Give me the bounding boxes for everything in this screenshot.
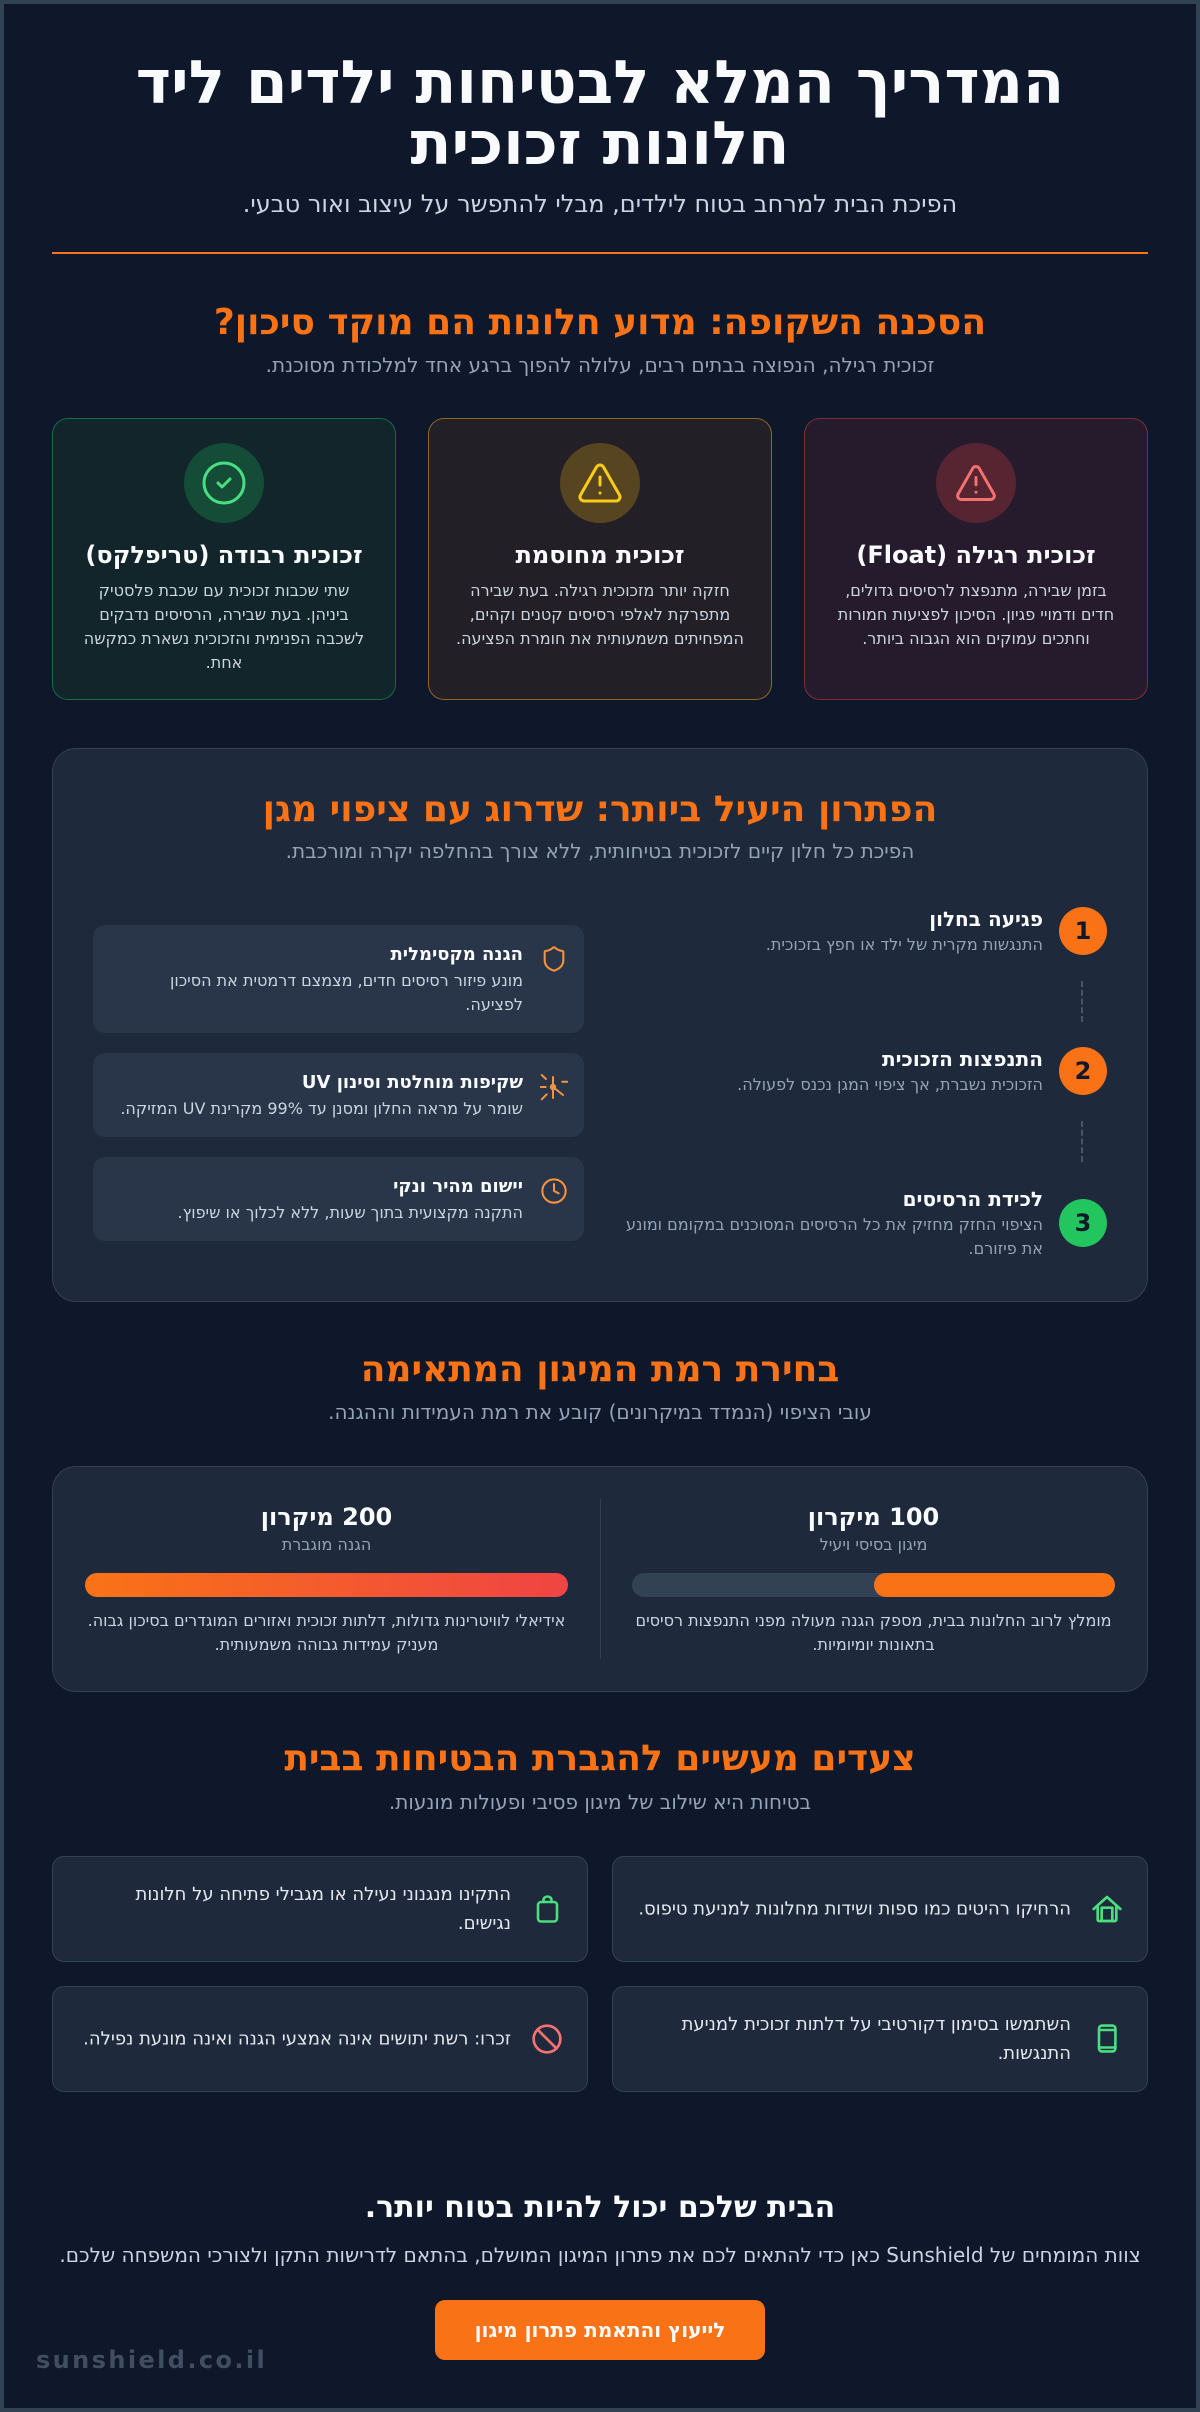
step 1 title: פגיעה בחלון: [929, 907, 1043, 931]
main title: חלונות זכוכית: [410, 109, 790, 179]
panel: float glass card: [804, 418, 1148, 700]
icon: lock clip: [536, 1895, 558, 1923]
heading: practical steps: צעדים מעשיים להגברת הבטיחות בבית: [284, 1738, 916, 1779]
step number 2: [1059, 1047, 1107, 1095]
icon: sun rays: [540, 1074, 568, 1100]
step number 3: 3: [1075, 1209, 1091, 1237]
step number 1: 1: [1075, 917, 1091, 945]
card text: laminated glass: שתי שכבות זכוכית עם שכבת פלסטיק ביניהן. בעת שבירה, הרסיסים נדבקים לשכבה הפנימית והזכוכית נשארת כמקשה אחת.: [84, 581, 364, 672]
feature: fast installation: [93, 1157, 584, 1241]
heading: the transparent danger: הסכנה השקופה: מדוע חלונות הם מוקד סיכון?: [214, 302, 986, 343]
tip: decorative marking: [612, 1986, 1148, 2092]
subheading: the transparent danger: זכוכית רגילה, הנפוצה בבתים רבים, עלולה להפוך ברגע אחד למלכודת מסוכנת.: [266, 353, 934, 377]
connector: step 1 to 2: [1081, 981, 1083, 1022]
step number 3: [1059, 1199, 1107, 1247]
icon: shield: [544, 946, 564, 972]
panel: laminated glass card: [52, 418, 396, 700]
main title: המדריך המלא לבטיחות ילדים ליד: [136, 48, 1064, 118]
200 micron title: 200 מיקרון: [261, 1503, 392, 1531]
icon: house: [1092, 1896, 1122, 1922]
step 1: impact: [766, 907, 1107, 955]
connector: step 2 to 3: [1081, 1121, 1083, 1162]
100 micron title: 100 מיקרון: [808, 1503, 939, 1531]
100 micron label: מיגון בסיסי ויעיל: [820, 1535, 927, 1554]
call to action button: [435, 2300, 765, 2360]
feature title: יישום מהיר ונקי: [393, 1176, 523, 1197]
panel: protective film solution: [52, 748, 1148, 1302]
feature title: שקיפות מוחלטת וסינון UV: [302, 1072, 523, 1093]
subheading: protective film: הפיכת כל חלון קיים לזכוכית בטיחותית, ללא צורך בהחלפה יקרה ומורכבת.: [286, 839, 914, 863]
call to action button: לייעוץ והתאמת פתרון מיגון: [475, 2318, 725, 2342]
heading: protection level: בחירת רמת המיגון המתאימה: [361, 1349, 839, 1390]
feature text: התקנה מקצועית בתוך שעות, ללא לכלוך או שיפוץ.: [177, 1203, 523, 1222]
card text: tempered glass: חזקה יותר מזכוכית רגילה. בעת שבירה מתפרקת לאלפי רסיסים קטנים וקהים, המפחיתים משמעותית את חומרת הפציעה.: [456, 581, 744, 648]
icon: phone-shaped marking: [1098, 2024, 1117, 2053]
column: 200 micron: [85, 1503, 568, 1654]
tip: insect net warning: [52, 1986, 588, 2092]
feature: maximum protection: [93, 925, 584, 1033]
icon: clock: [541, 1178, 567, 1204]
icon: yellow warning triangle: [560, 443, 640, 523]
brand watermark: sunshield.co.il: [36, 2346, 267, 2374]
step 2 title: התנפצות הזכוכית: [882, 1047, 1043, 1071]
feature: clarity and UV: [93, 1053, 584, 1137]
card text: float glass: בזמן שבירה, מתנפצת לרסיסים גדולים, חדים ודמויי פגיון. הסיכון לפציעות חמורות וחתכים עמוקים הוא הגבוה ביותר.: [838, 581, 1114, 648]
tip: move furniture: [612, 1856, 1148, 1962]
card title: laminated glass: זכוכית רבודה (טריפלקס): [85, 541, 363, 569]
divider: [600, 1499, 601, 1659]
card title: float glass: זכוכית רגילה (Float): [856, 541, 1096, 569]
call to action title: הבית שלכם יכול להיות בטוח יותר.: [365, 2190, 835, 2225]
tip text: השתמשו בסימון דקורטיבי על דלתות זכוכית למניעת התנגשות.: [682, 2014, 1071, 2064]
step 2 text: הזכוכית נשברת, אך ציפוי המגן נכנס לפעולה.: [737, 1075, 1043, 1094]
panel: thickness comparison: [52, 1466, 1148, 1692]
thickness bar 100%: [85, 1573, 568, 1597]
icon: green check circle: [184, 443, 264, 523]
step 3 title: לכידת הרסיסים: [903, 1187, 1043, 1211]
feature title: הגנה מקסימלית: [390, 944, 523, 965]
call to action text: צוות המומחים של Sunshield כאן כדי להתאים לכם את פתרון המיגון המושלם, בהתאם לדרישות התקן ולצורכי המשפחה שלכם.: [59, 2243, 1141, 2267]
step 2: shatter: [737, 1047, 1107, 1095]
feature text: מונע פיזור רסיסים חדים, מצמצם דרמטית את הסיכון לפציעה.: [170, 971, 523, 1014]
100 micron text: מומלץ לרוב החלונות בבית, מספק הגנה מעולה מפני התנפצות רסיסים בתאונות יומיומיות.: [635, 1611, 1112, 1654]
subtitle: הפיכת הבית למרחב בטוח לילדים, מבלי להתפשר על עיצוב ואור טבעי.: [243, 190, 957, 218]
step 1 text: התנגשות מקרית של ילד או חפץ בזכוכית.: [766, 935, 1043, 954]
tip: window locks: [52, 1856, 588, 1962]
header divider: [52, 252, 1148, 254]
step number 1: [1059, 907, 1107, 955]
tip text: הרחיקו רהיטים כמו ספות ושידות מחלונות למניעת טיפוס.: [638, 1899, 1071, 1920]
feature text: שומר על מראה החלון ומסנן עד 99% מקרינת UV המזיקה.: [120, 1099, 523, 1118]
icon: ban: [532, 2024, 562, 2054]
subheading: practical steps: בטיחות היא שילוב של מיגון פסיבי ופעולות מונעות.: [389, 1790, 811, 1814]
main title: [136, 48, 1064, 179]
step number 2: 2: [1075, 1057, 1091, 1085]
step 3: holding shards: [626, 1187, 1107, 1258]
tip text: זכרו: רשת יתושים אינה אמצעי הגנה ואינה מונעת נפילה.: [83, 2029, 511, 2050]
200 micron label: הגנה מוגברת: [282, 1535, 371, 1554]
step 3 text: הציפוי החזק מחזיק את כל הרסיסים המסוכנים במקומם ומונע את פיזורם.: [626, 1215, 1043, 1258]
column: 100 micron: [632, 1503, 1115, 1654]
200 micron text: אידיאלי לוויטרינות גדולות, דלתות זכוכית ואזורים המוגדרים בסיכון גבוה. מעניק עמידות גבוהה משמעותית.: [88, 1611, 565, 1654]
subheading: protection level: עובי הציפוי (הנמדד במיקרונים) קובע את רמת העמידות וההגנה.: [328, 1400, 872, 1424]
thickness bar 50%: [632, 1573, 1115, 1597]
icon: red warning triangle: [936, 443, 1016, 523]
heading: protective film: הפתרון היעיל ביותר: שדרוג עם ציפוי מגן: [263, 789, 937, 830]
panel: tempered glass card: [428, 418, 772, 700]
card title: tempered glass: זכוכית מחוסמת: [515, 541, 685, 569]
tip text: התקינו מנגנוני נעילה או מגבילי פתיחה על חלונות נגישים.: [136, 1884, 511, 1934]
